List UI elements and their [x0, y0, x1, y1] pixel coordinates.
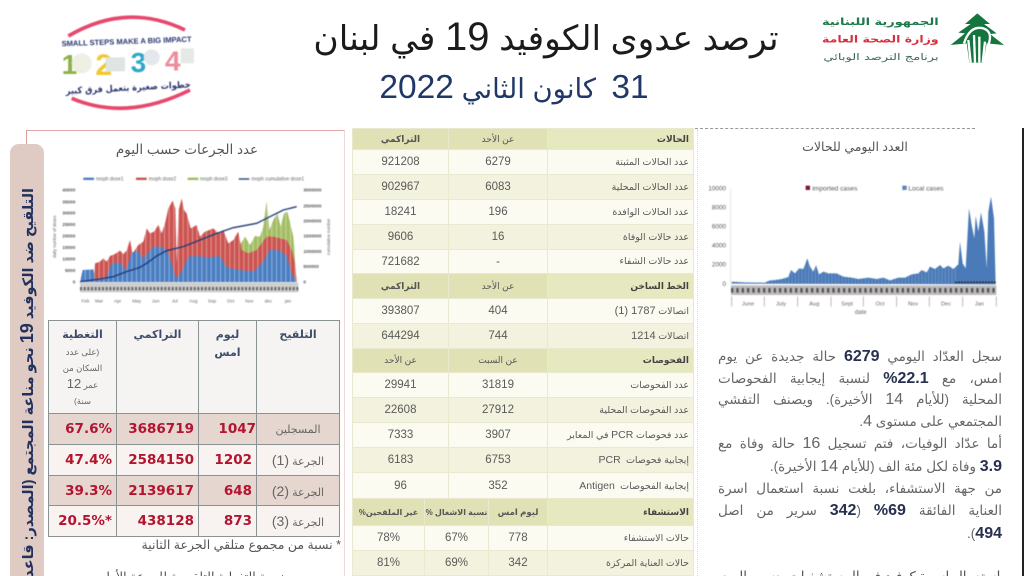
y axis: 8000	[712, 205, 726, 212]
table: cases: عدد حالات الوفاة	[623, 232, 689, 242]
table: cases: 9606	[388, 231, 413, 243]
table: hotline: 393807	[381, 305, 420, 317]
table: cases: 902967	[381, 181, 420, 193]
y axis: 0	[722, 281, 726, 288]
month labels: Jun	[152, 298, 160, 303]
table: vaccination summary: 1047	[218, 421, 256, 437]
red dose 2	[80, 198, 297, 282]
y axis	[708, 186, 726, 288]
table: cases: عدد حالات الشفاء	[620, 256, 689, 267]
table: cases	[352, 128, 694, 273]
month labels: Oct	[876, 301, 885, 307]
right axis: 1000000	[303, 249, 322, 254]
summary paragraph: سجل العدّاد اليومي 6279 حالة جديدة عن يوم	[718, 348, 1002, 365]
table: hotline: عن الأحد	[482, 280, 514, 290]
table: tests: إيجابية الفحوصات Antigen	[579, 480, 689, 492]
table: vaccination summary: 47.4%	[65, 452, 112, 468]
right axis	[303, 188, 322, 284]
table: vaccination summary: التغطية	[62, 329, 103, 341]
table: tests: 352	[488, 480, 508, 492]
panel: daily cases	[695, 128, 998, 316]
table: vaccination summary: (على عدد	[66, 347, 99, 357]
table: tests	[352, 349, 694, 498]
table: vaccination summary: الجرعة (1)	[272, 452, 324, 468]
table: vaccination summary: 2584150	[128, 452, 194, 468]
doses chart title: عدد الجرعات حسب اليوم	[116, 142, 258, 157]
legend: moph cumulative dose1	[251, 177, 304, 183]
table: cases: -	[496, 256, 500, 268]
table: hotline	[352, 274, 694, 348]
left axis: 15000	[62, 245, 76, 250]
table: hotline: اتصالات 1787 (1)	[615, 305, 689, 317]
left axis: 20000	[62, 234, 76, 239]
table: hospitalisation: 778	[508, 532, 528, 544]
table: tests: 3907	[485, 429, 511, 441]
table: hospitalisation: 67%	[445, 532, 468, 544]
table: cases: 921208	[381, 156, 420, 168]
table: hospitalisation: ليوم امس	[498, 506, 538, 516]
logo arabic slogan: خطوات صغيرة بتعمل فرق كبير	[65, 80, 191, 97]
summary paragraph: من جهة الاستشفاء، بلغت نسبة استعمال اسرة	[718, 481, 1002, 496]
table: cases: الحالات	[657, 134, 689, 144]
green dose 3	[233, 201, 297, 282]
footnote: * نسبة من مجموع متلقي الجرعة الثانية	[142, 538, 341, 552]
month labels: Nov	[908, 301, 918, 307]
table: tests: 96	[394, 480, 407, 492]
imported cases	[955, 280, 996, 284]
date subtitle: 31 كانون الثاني 2022	[379, 69, 649, 106]
left axis: 35000	[62, 199, 76, 204]
table: vaccination summary: ليوم	[216, 329, 239, 341]
top red arc	[68, 17, 185, 36]
panel outline	[26, 130, 345, 576]
left axis: 30000	[62, 211, 76, 216]
number 3: 3	[131, 47, 146, 78]
right axis: 1500000	[303, 234, 322, 239]
table: hospitalisation: حالات العناية المركزة	[606, 558, 689, 568]
table: vaccination summary: 39.3%	[65, 482, 112, 498]
table: vaccination summary: 438128	[138, 513, 194, 529]
legend: moph dose3	[200, 177, 228, 183]
month labels: Mar	[95, 298, 103, 303]
month labels: Sept	[841, 301, 853, 307]
summary paragraph: المجتمعي على مستوى 4.	[859, 413, 1002, 430]
left axis: 40000	[62, 188, 76, 193]
y axis: 4000	[712, 243, 726, 250]
table: tests: 27912	[482, 404, 514, 416]
table: vaccination summary: 20.5%*	[58, 513, 112, 529]
table: cases: 18241	[384, 206, 416, 218]
summary paragraph: 494).	[967, 525, 1002, 542]
summary paragraph: المحلية (للأيام 14 الأخيرة). ويصنف التفشي	[718, 391, 1002, 408]
month labels: Jul	[172, 298, 178, 303]
table: hospitalisation	[352, 499, 694, 576]
table: cases: 6279	[485, 156, 511, 168]
month labels: July	[776, 301, 786, 307]
table: cases: 196	[488, 206, 508, 218]
month labels: May	[132, 298, 142, 303]
right axis: 0	[303, 279, 306, 284]
table: vaccination summary: 873	[224, 513, 252, 529]
axis titles: daily number of doses	[52, 215, 57, 258]
month labels	[742, 301, 984, 316]
table: cases: 721682	[381, 256, 420, 268]
left axis	[62, 188, 76, 284]
left axis: 25000	[62, 222, 76, 227]
month labels: June	[742, 301, 754, 307]
number 2	[95, 49, 125, 82]
vaccination sidebar	[10, 144, 44, 576]
legend: imported cases	[812, 186, 858, 193]
table: vaccination summary: 2139617	[128, 482, 194, 498]
number 4: 4	[165, 46, 181, 77]
table: hospitalisation: 81%	[377, 557, 400, 569]
date axis band	[80, 282, 298, 292]
month labels: jan	[284, 298, 292, 303]
table: cases: عدد الحالات المثبتة	[615, 156, 689, 168]
y axis: 2000	[712, 262, 726, 269]
blue dose 1	[80, 247, 297, 282]
table: vaccination summary: التلقيح	[279, 329, 317, 341]
month labels: dec	[265, 298, 273, 303]
month dividers	[732, 297, 996, 307]
number 1	[62, 49, 92, 80]
chart: daily doses	[52, 176, 331, 304]
ministry name: برنامج الترصد الوبائي	[823, 53, 939, 63]
left axis: 5000	[65, 268, 76, 273]
chart: daily doses: cumulative number	[326, 218, 331, 255]
month labels: Apr	[114, 298, 122, 303]
table: hospitalisation: %غير الملقحين	[359, 508, 418, 516]
table: vaccination summary: المسجلين	[275, 424, 320, 436]
table: vaccination summary: الجرعة (3)	[272, 513, 324, 529]
number 3	[131, 47, 160, 78]
table: vaccination summary: السكان من	[63, 363, 102, 373]
table: tests: عدد فحوصات PCR في المعابر	[567, 429, 689, 441]
panel outline	[695, 128, 975, 129]
month labels: Sep	[208, 298, 217, 303]
month labels: Feb	[81, 298, 90, 303]
summary paragraph: امس، مع 22.1% لنسبة إيجابية الفحوصات	[718, 370, 1002, 387]
table: hotline: اتصالات 1214	[631, 330, 689, 342]
table: hospitalisation: % نسبة الاشغال	[426, 508, 487, 516]
title: ترصد عدوى الكوفيد 19 في لبنان	[313, 15, 779, 59]
month labels	[81, 298, 292, 303]
table: cases: 16	[492, 231, 504, 243]
weekly bar gaps	[80, 110, 297, 370]
ministry name: الجمهورية اللبنانية	[822, 17, 939, 28]
bar gaps	[732, 108, 958, 372]
right axis: 500000	[303, 264, 319, 269]
table: hospitalisation: 342	[508, 557, 528, 569]
logo: small steps make a big impact	[61, 14, 194, 111]
table: tests: عدد الفحوصات المحلية	[599, 404, 689, 416]
table: hotline: 644294	[381, 330, 420, 342]
table: tests: 29941	[384, 379, 416, 391]
table: hotline: 404	[488, 305, 508, 317]
table: cases: 6083	[485, 181, 511, 193]
table: hotline: الخط الساخن	[630, 280, 689, 290]
summary paragraph: 3.9 وفاة لكل مئة الف (للأيام 14 الأخيرة).	[770, 458, 1002, 475]
table: vaccination summary: التراكمي	[134, 329, 181, 341]
ministry name	[822, 17, 939, 63]
table: tests: عن السبت	[478, 355, 518, 365]
table: vaccination summary: سنة)	[74, 396, 91, 406]
table: hospitalisation: حالات الاستشفاء	[624, 532, 689, 544]
legend: moph dose1	[96, 177, 124, 183]
icon: cedar	[951, 13, 1004, 63]
summary paragraph: العناية الفائقة 69% (342 سرير من اصل	[718, 502, 1002, 519]
logo headline: SMALL STEPS MAKE A BIG IMPACT	[61, 35, 192, 48]
table: cases: عدد الحالات المحلية	[612, 182, 689, 192]
left axis: 0	[73, 279, 76, 284]
daily cases chart title: العدد اليومي للحالات	[802, 140, 908, 154]
month labels: Nov	[245, 298, 254, 303]
yellow panel edge	[697, 130, 698, 576]
table: tests: 6183	[388, 454, 413, 466]
sidebar rotated heading: التلقيح ضد الكوفيد 19 نحو مناعة المجتمع (المصدر: قاعدة	[17, 188, 37, 576]
table: tests: 22608	[384, 404, 416, 416]
chart: daily cases	[708, 184, 998, 316]
table: hospitalisation: 78%	[377, 532, 400, 544]
month labels: Aug	[189, 298, 198, 303]
table: vaccination summary: امس	[214, 347, 241, 359]
table: hospitalisation: 69%	[445, 557, 468, 569]
table: vaccination summary: 67.6%	[65, 421, 112, 437]
table: hotline: التراكمي	[381, 280, 420, 290]
cumulative line	[80, 207, 297, 282]
month labels: Jan	[975, 301, 984, 307]
table: vaccination summary	[48, 320, 340, 537]
number 1: 1	[62, 49, 77, 80]
table: tests: عدد الفحوصات	[630, 380, 689, 390]
y axis: 10000	[708, 186, 726, 193]
summary paragraph: أما عدّاد الوفيات، فتم تسجيل 16 حالة وفاة مع	[718, 435, 1002, 452]
table: hospitalisation: الاستشفاء	[643, 506, 689, 516]
logo: ministry of public health	[822, 13, 1004, 63]
table: tests: 6753	[485, 454, 511, 466]
table: tests: عن الأحد	[384, 355, 417, 365]
right axis: 2500000	[303, 203, 322, 208]
table: tests: 31819	[482, 379, 514, 391]
table: cases: عن الأحد	[482, 134, 514, 144]
legend	[83, 177, 304, 183]
panel: vaccination	[10, 130, 345, 576]
y axis: 6000	[712, 224, 726, 231]
table: vaccination summary: 3686719	[128, 421, 194, 437]
month labels: Oct	[227, 298, 235, 303]
table: cases: التراكمي	[381, 134, 420, 144]
left axis: 10000	[62, 257, 76, 262]
legend: moph dose2	[149, 177, 176, 183]
number 4	[165, 46, 194, 77]
month labels: Aug	[809, 301, 819, 307]
right axis: 2000000	[303, 219, 322, 224]
table: cases: عدد الحالات الوافدة	[612, 206, 689, 218]
panel edge	[1022, 128, 1024, 576]
table: tests: إيجابية فحوصات PCR	[598, 454, 689, 466]
table: vaccination summary: 648	[224, 482, 252, 498]
summary paragraph	[718, 348, 1002, 542]
legend: Local cases	[908, 186, 944, 193]
table: tests: 7333	[388, 429, 413, 441]
ministry name: وزارة الصحة العامة	[822, 35, 939, 46]
local cases bars	[732, 197, 996, 284]
month labels: date	[855, 310, 867, 316]
number 2: 2	[95, 49, 112, 82]
table: vaccination summary: عمر 12	[67, 376, 98, 391]
table: vaccination summary: الجرعة (2)	[272, 482, 324, 498]
date axis band	[731, 285, 996, 295]
table: hotline: 744	[488, 330, 508, 342]
bottom red arc	[72, 90, 190, 108]
right axis: 3000000	[303, 188, 322, 193]
legend	[806, 186, 944, 193]
table: tests: الفحوصات	[643, 355, 689, 365]
table: vaccination summary: 1202	[214, 452, 252, 468]
month labels: Dec	[941, 301, 951, 307]
